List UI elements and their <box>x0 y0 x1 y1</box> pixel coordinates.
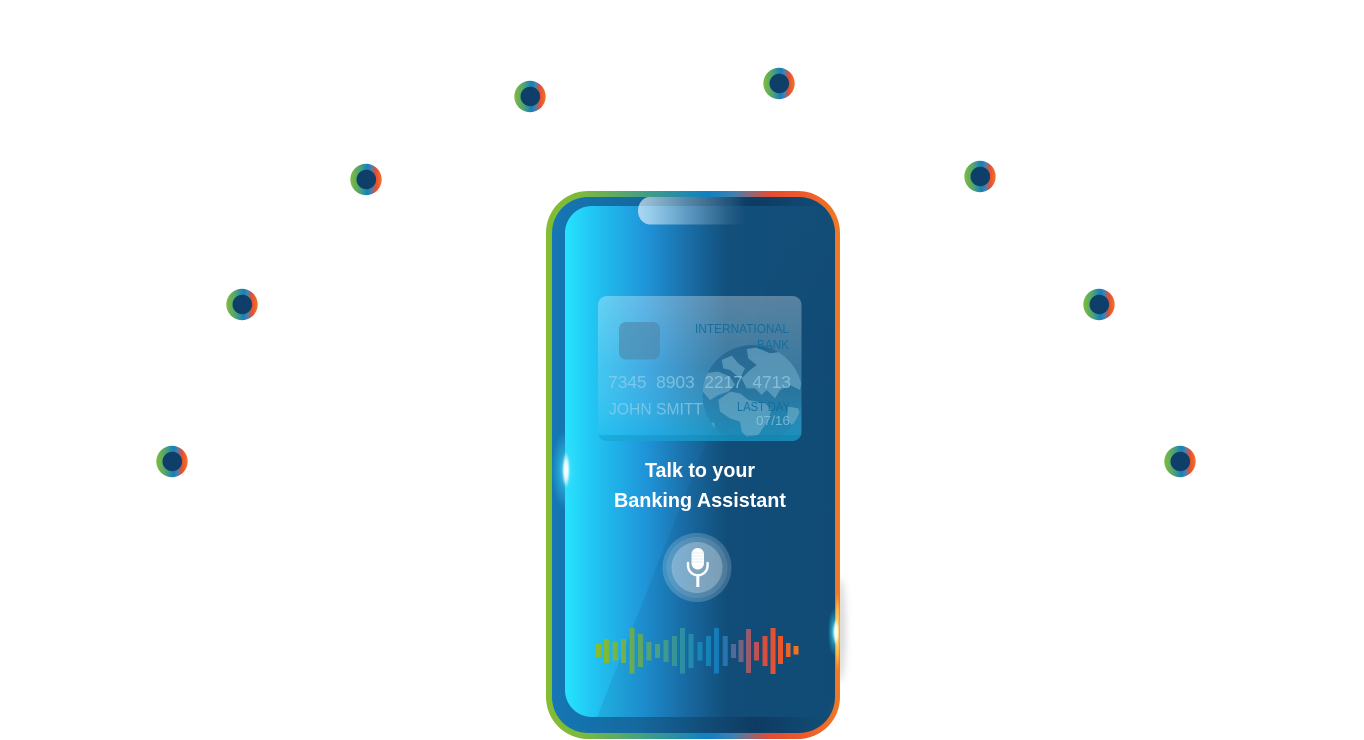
card lower edge <box>598 435 757 441</box>
card base <box>598 296 802 441</box>
dot: far right <box>1164 446 1196 477</box>
light flare: left <box>552 434 573 506</box>
shadow beside phone <box>834 578 846 682</box>
dot: right <box>1083 289 1115 320</box>
expiry: LAST DAY <box>737 399 790 414</box>
microphone button <box>662 533 732 602</box>
card number: 7345 8903 2217 4713 <box>608 372 791 392</box>
dot: upper left <box>350 164 382 195</box>
card chip <box>619 322 660 360</box>
bank name: INTERNATIONAL <box>695 321 789 336</box>
light flare: right <box>828 594 840 670</box>
dot: far left <box>156 446 188 477</box>
heading <box>614 460 786 512</box>
infographic canvas <box>156 68 1196 739</box>
heading: Banking Assistant <box>614 490 786 512</box>
icon: microphone <box>688 548 708 587</box>
heading: Talk to your <box>645 460 755 482</box>
dot: left <box>226 289 258 320</box>
bank name: BANK <box>757 337 789 352</box>
expiry <box>737 399 790 428</box>
connector dots <box>156 68 1196 477</box>
dot: upper right <box>964 161 996 192</box>
expiry: 07/16 <box>756 413 790 428</box>
screen glare <box>597 499 686 717</box>
dot: top right <box>763 68 795 99</box>
phone <box>546 191 846 739</box>
phone body <box>552 197 835 733</box>
phone rim <box>546 191 840 739</box>
credit card <box>598 296 803 445</box>
card holder: JOHN SMITT <box>609 400 703 418</box>
dot: top left <box>514 81 546 112</box>
phone screen <box>565 206 835 717</box>
sound wave <box>596 628 798 674</box>
notch <box>638 197 745 224</box>
globe <box>702 345 803 445</box>
bank name <box>695 321 789 352</box>
